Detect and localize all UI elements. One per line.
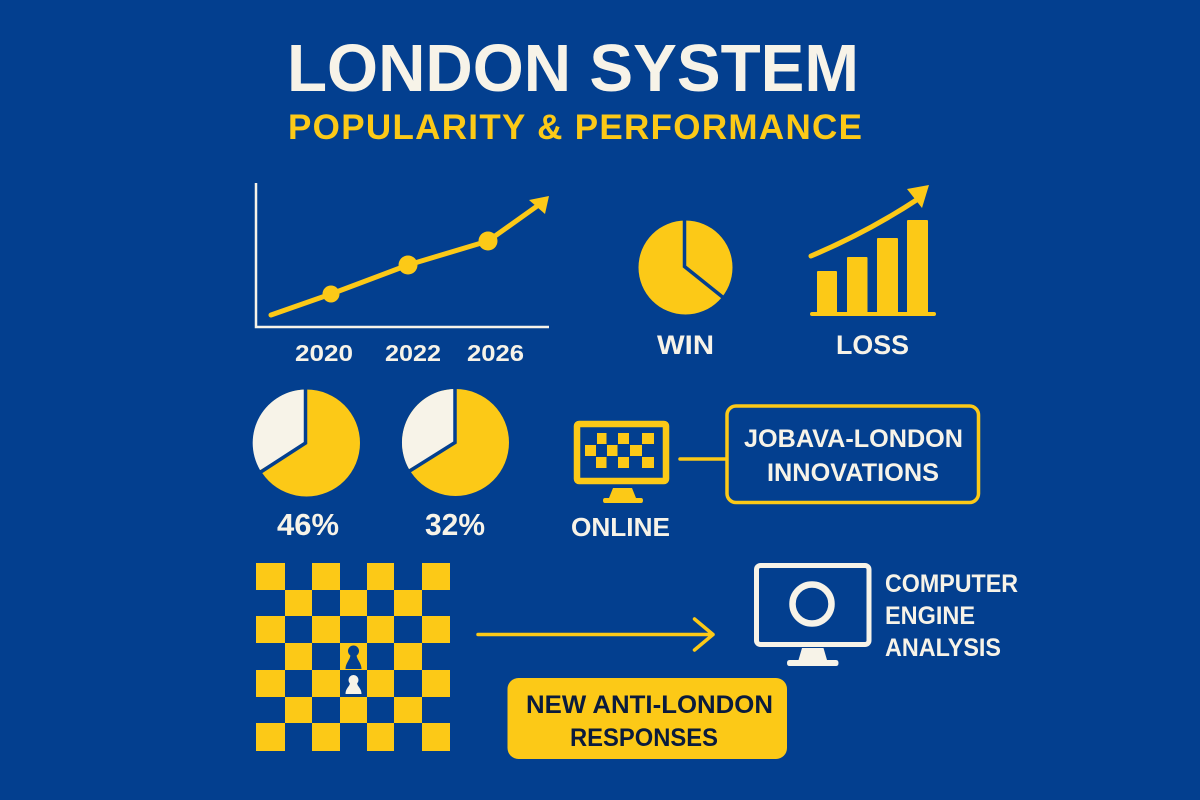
monitor stand — [603, 488, 643, 503]
title: LONDON SYSTEM — [287, 31, 859, 106]
callout text line one: NEW ANTI-LONDON — [526, 691, 773, 719]
callout box — [727, 406, 978, 502]
year labels: 2022 — [385, 340, 441, 366]
year labels: 2020 — [295, 340, 353, 366]
callout text line two: RESPONSES — [570, 724, 718, 752]
screen checker pattern — [585, 433, 654, 468]
callout text line one: JOBAVA-LONDON — [744, 425, 963, 453]
year labels: 2026 — [467, 340, 524, 366]
arrow from board to engine — [478, 619, 713, 650]
year labels — [295, 340, 524, 366]
32% pie chart — [402, 388, 509, 542]
pie disc — [402, 389, 509, 496]
slice separator — [260, 389, 306, 472]
computer engine analysis text: ENGINE — [885, 602, 975, 630]
pie disc — [253, 390, 360, 496]
46% pie chart — [253, 389, 360, 542]
32% label: 32% — [425, 507, 485, 542]
computer engine analysis text: COMPUTER — [885, 570, 1018, 598]
win label: WIN — [657, 330, 714, 360]
callout: new anti-London responses — [508, 678, 787, 759]
online monitor icon — [571, 424, 670, 542]
bars — [810, 220, 936, 316]
monitor frame — [577, 424, 666, 481]
white pawn — [346, 675, 362, 694]
slice separator — [408, 388, 455, 472]
slice separator — [684, 219, 725, 299]
chart axes — [256, 183, 549, 327]
engine ring — [792, 584, 832, 624]
cream slice — [253, 389, 306, 470]
line chart: popularity trend 2020 to 2026 — [256, 183, 549, 366]
pie disc — [638, 220, 732, 314]
trend line — [271, 204, 540, 315]
46% label: 46% — [277, 507, 339, 542]
subtitle: POPULARITY & PERFORMANCE — [288, 108, 862, 147]
connector line — [680, 457, 727, 461]
blue pawn — [346, 646, 362, 669]
cream slice — [402, 389, 456, 469]
rising arrow — [811, 199, 918, 256]
loss bar chart — [810, 185, 936, 360]
online label: ONLINE — [571, 512, 670, 542]
win pie chart — [638, 219, 732, 360]
computer engine monitor icon — [756, 566, 869, 666]
monitor stand — [787, 648, 838, 666]
computer engine analysis text — [885, 570, 1018, 662]
callout: Jobava-London innovations — [727, 406, 978, 502]
board squares — [256, 563, 450, 751]
callout text line two: INNOVATIONS — [767, 459, 939, 487]
loss label: LOSS — [836, 330, 909, 360]
monitor frame — [756, 566, 869, 644]
yellow box — [508, 678, 787, 759]
rising arrowhead — [907, 185, 929, 208]
computer engine analysis text: ANALYSIS — [885, 634, 1001, 662]
arrowhead — [529, 196, 549, 214]
data points — [322, 232, 498, 302]
chessboard with pawns — [256, 563, 450, 751]
